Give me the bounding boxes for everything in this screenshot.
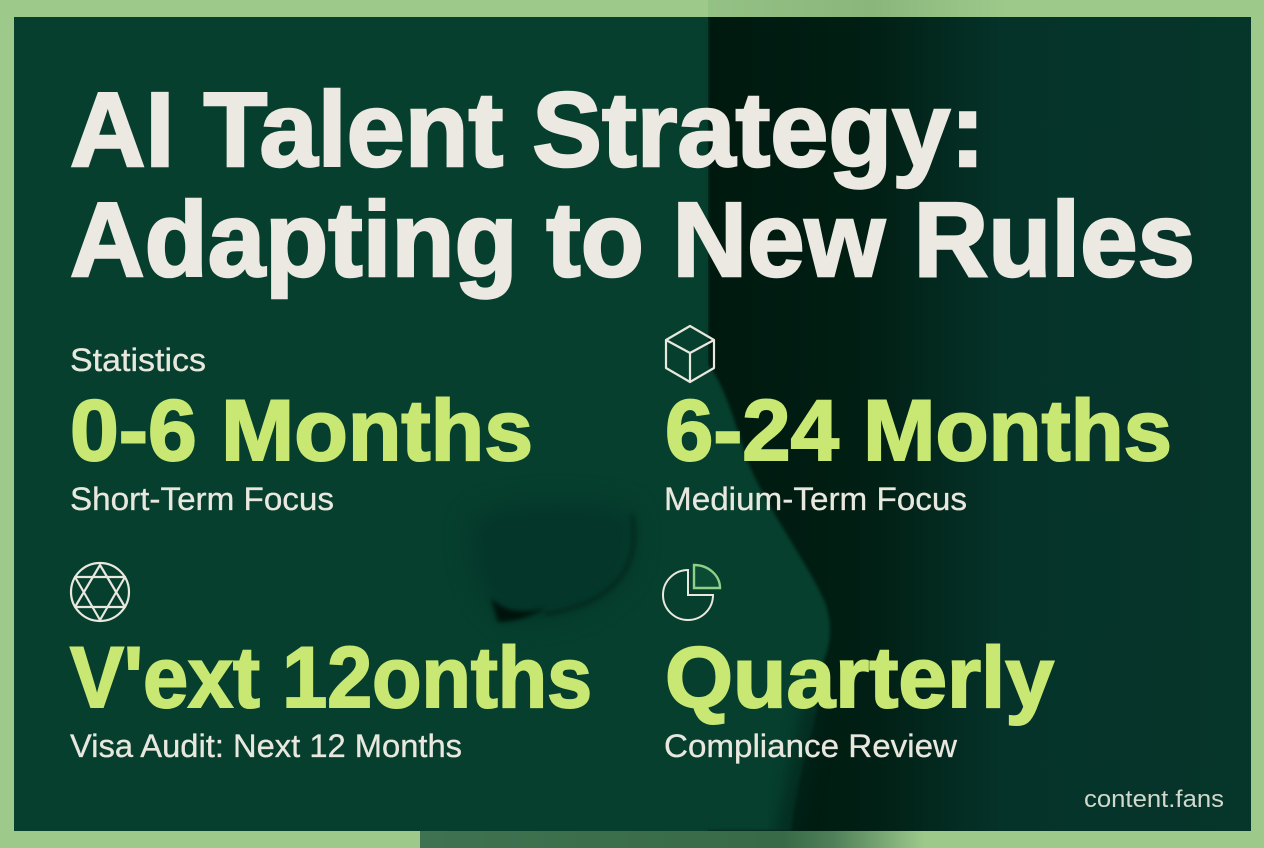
value: quarterly: Quarterly bbox=[665, 630, 1054, 726]
panel: visa audit statistic bbox=[70, 563, 592, 764]
caption: short-term focus: Short-Term Focus bbox=[70, 481, 334, 517]
value: 0-6 months: 0-6 Months bbox=[70, 383, 533, 479]
value: 6-24 months: 6-24 Months bbox=[665, 383, 1172, 479]
icon: cube bbox=[666, 326, 714, 382]
panel: short-term statistic bbox=[70, 342, 533, 517]
title: AI Talent Strategy: bbox=[70, 71, 985, 189]
caption: compliance review: Compliance Review bbox=[664, 728, 958, 764]
brand credit: content.fans bbox=[1084, 786, 1224, 813]
title: Adapting to New Rules bbox=[70, 181, 1195, 299]
icon: pie chart bbox=[663, 565, 720, 620]
label: statistics: Statistics bbox=[70, 342, 206, 378]
title bbox=[70, 71, 1195, 299]
caption: visa audit: Visa Audit: Next 12 Months bbox=[70, 728, 462, 764]
icon: hexagram in circle bbox=[71, 563, 129, 621]
panel: medium-term statistic bbox=[664, 326, 1172, 517]
caption: medium-term focus: Medium-Term Focus bbox=[664, 481, 967, 517]
panel: compliance statistic bbox=[663, 565, 1054, 764]
value: next 12 months (garbled in source): V'ext 12onths bbox=[70, 630, 592, 726]
